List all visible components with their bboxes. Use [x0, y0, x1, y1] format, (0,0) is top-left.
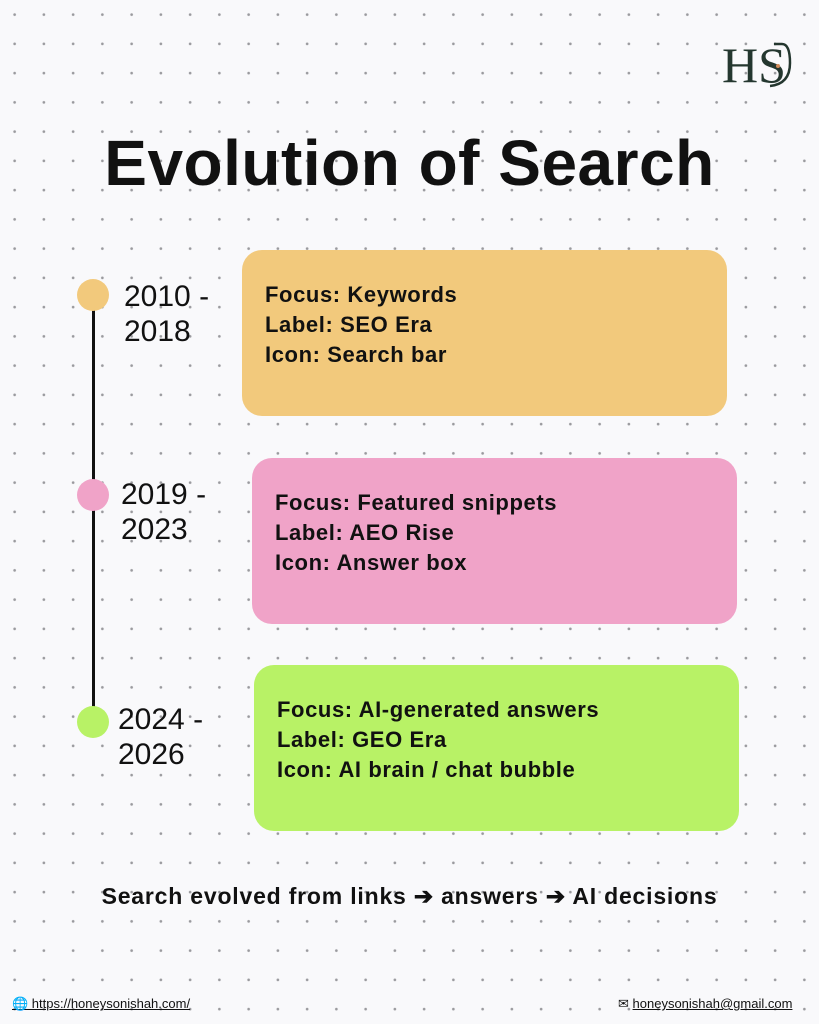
year: 2019-2023	[121, 478, 206, 546]
timeline node: 2010-2018	[77, 279, 109, 311]
card: SEO era: Focus: Keywords	[265, 282, 457, 307]
year: 2019-2023: 2023	[121, 513, 188, 546]
year: 2010-2018	[124, 280, 209, 348]
year: 2010-2018: 2010 -	[124, 280, 209, 313]
footer: email: ✉ honeysonishah@gmail.com	[618, 996, 792, 1011]
card: AEO rise: Icon: Answer box	[275, 550, 467, 575]
card: SEO era: Icon: Search bar	[265, 342, 447, 367]
timeline	[77, 279, 109, 738]
year: 2019-2023: 2019 -	[121, 478, 206, 511]
card: AEO rise: Label: AEO Rise	[275, 520, 454, 545]
card: SEO era: Label: SEO Era	[265, 312, 432, 337]
year: 2010-2018: 2018	[124, 315, 191, 348]
card: GEO era: Icon: AI brain / chat bubble	[277, 757, 575, 782]
card: SEO era	[242, 250, 727, 416]
card: GEO era: Focus: AI-generated answers	[277, 697, 599, 722]
card: GEO era: Label: GEO Era	[277, 727, 447, 752]
timeline node: 2019-2023	[77, 479, 109, 511]
year: 2024-2026	[118, 703, 203, 771]
card: GEO era	[254, 665, 739, 831]
summary text: Search evolved from links ➔ answers ➔ AI decisions	[102, 883, 717, 909]
year: 2024-2026: 2026	[118, 738, 185, 771]
footer: website: 🌐 https://honeysonishah.com/	[12, 996, 190, 1011]
card: AEO rise	[252, 458, 737, 624]
year: 2024-2026: 2024 -	[118, 703, 203, 736]
title: Evolution of Search	[104, 127, 715, 199]
card: AEO rise: Focus: Featured snippets	[275, 490, 557, 515]
timeline node: 2024-2026	[77, 706, 109, 738]
